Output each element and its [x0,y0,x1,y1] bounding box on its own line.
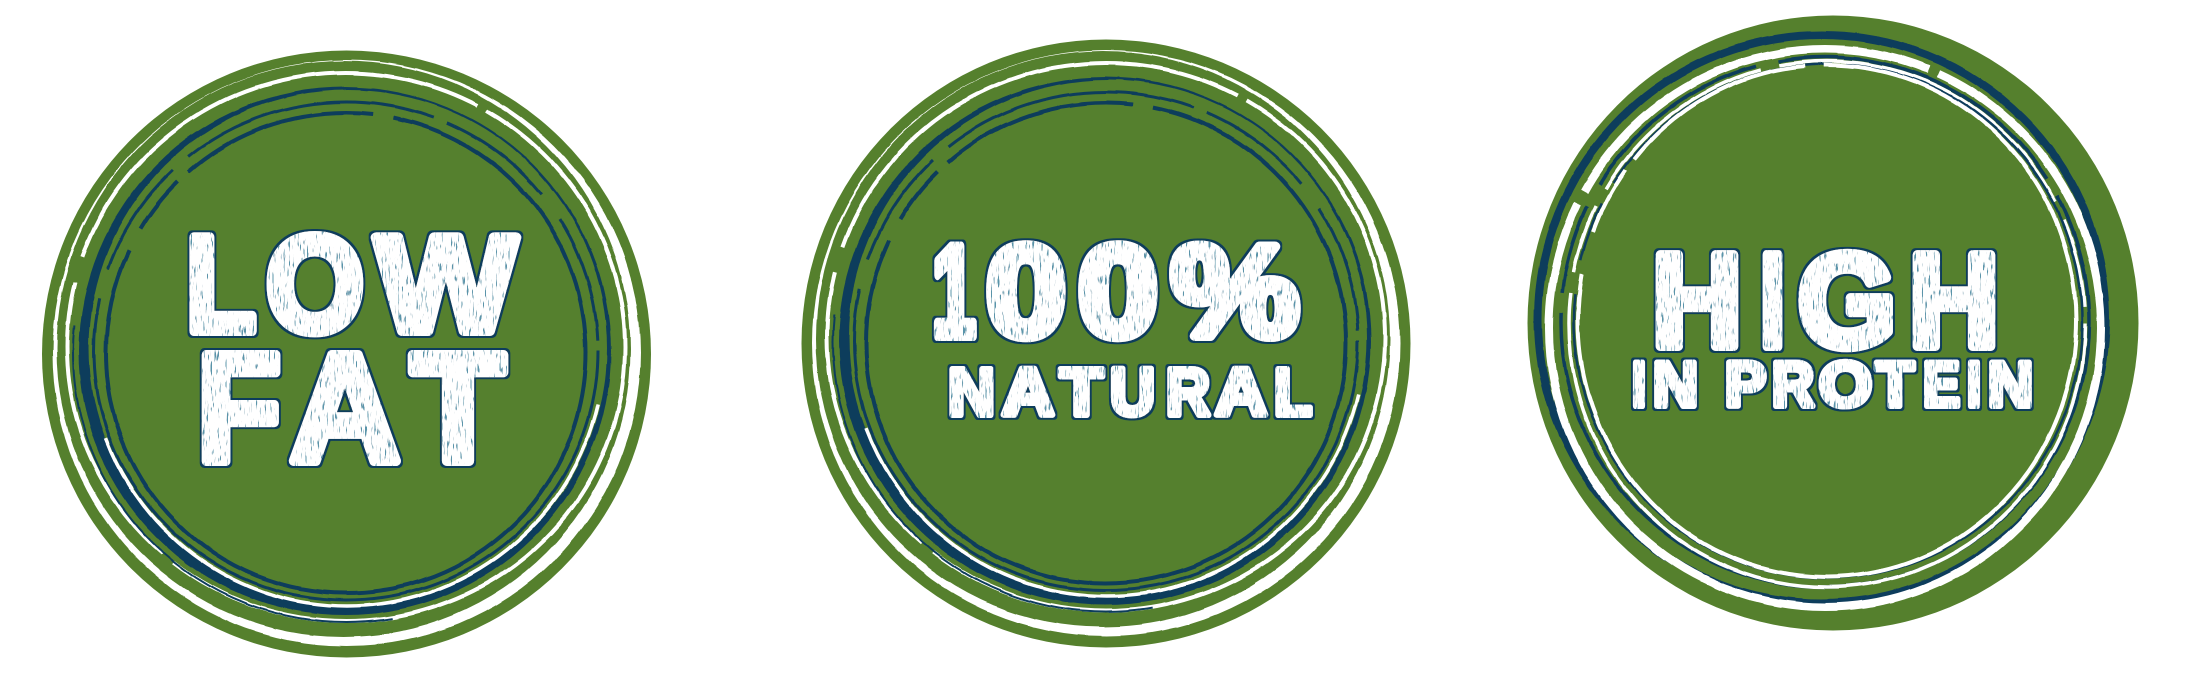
headline: in protein: O [1819,350,1872,420]
headline: natural: T [1060,355,1103,430]
green disc [42,50,651,658]
headline: low fat [186,208,517,494]
headline: natural: U [1110,355,1155,430]
headline: low fat: F [197,322,281,494]
headline: high: I [1760,227,1785,374]
headline: high: G [1798,227,1896,374]
headline: natural: L [1274,355,1312,430]
headline: in protein: T [1876,350,1914,420]
headline: in protein: E [1923,350,1960,420]
headline: in protein: N [1988,350,2033,420]
headline: in protein: I [1632,350,1646,420]
green disc [802,40,1410,648]
badge: 100% natural [802,40,1410,648]
headline: low fat: T [411,322,505,494]
headline: in protein: N [1653,350,1698,420]
headline: 100%: % [1171,218,1299,364]
headline: 100%: 0 [986,218,1066,364]
badge: high in protein [1528,16,2138,630]
headline: 100%: 0 [1078,218,1158,364]
headline: in protein: P [1725,350,1766,420]
scribbled rings [1538,35,2106,607]
headline: low fat: W [376,208,517,360]
headline: high: H [1909,227,1999,374]
headline: natural: A [1002,355,1054,430]
badge: low fat [42,50,651,658]
headline: low fat: L [186,208,256,360]
headline: 100% [932,218,1312,430]
headline: low fat: A [290,322,400,494]
headline: natural: A [1215,355,1267,430]
scribbled rings [812,50,1400,636]
headline: natural: N [948,355,995,430]
headline: in protein: R [1772,350,1814,420]
headline: natural: R [1166,355,1210,430]
headline: in protein: I [1967,350,1981,420]
headline: 100%: 1 [932,218,976,364]
headline: low fat: O [266,208,364,360]
headline: high: H [1652,227,1742,374]
green disc [1528,16,2138,630]
headline: high [1632,227,2033,420]
scribbled rings [52,60,640,646]
